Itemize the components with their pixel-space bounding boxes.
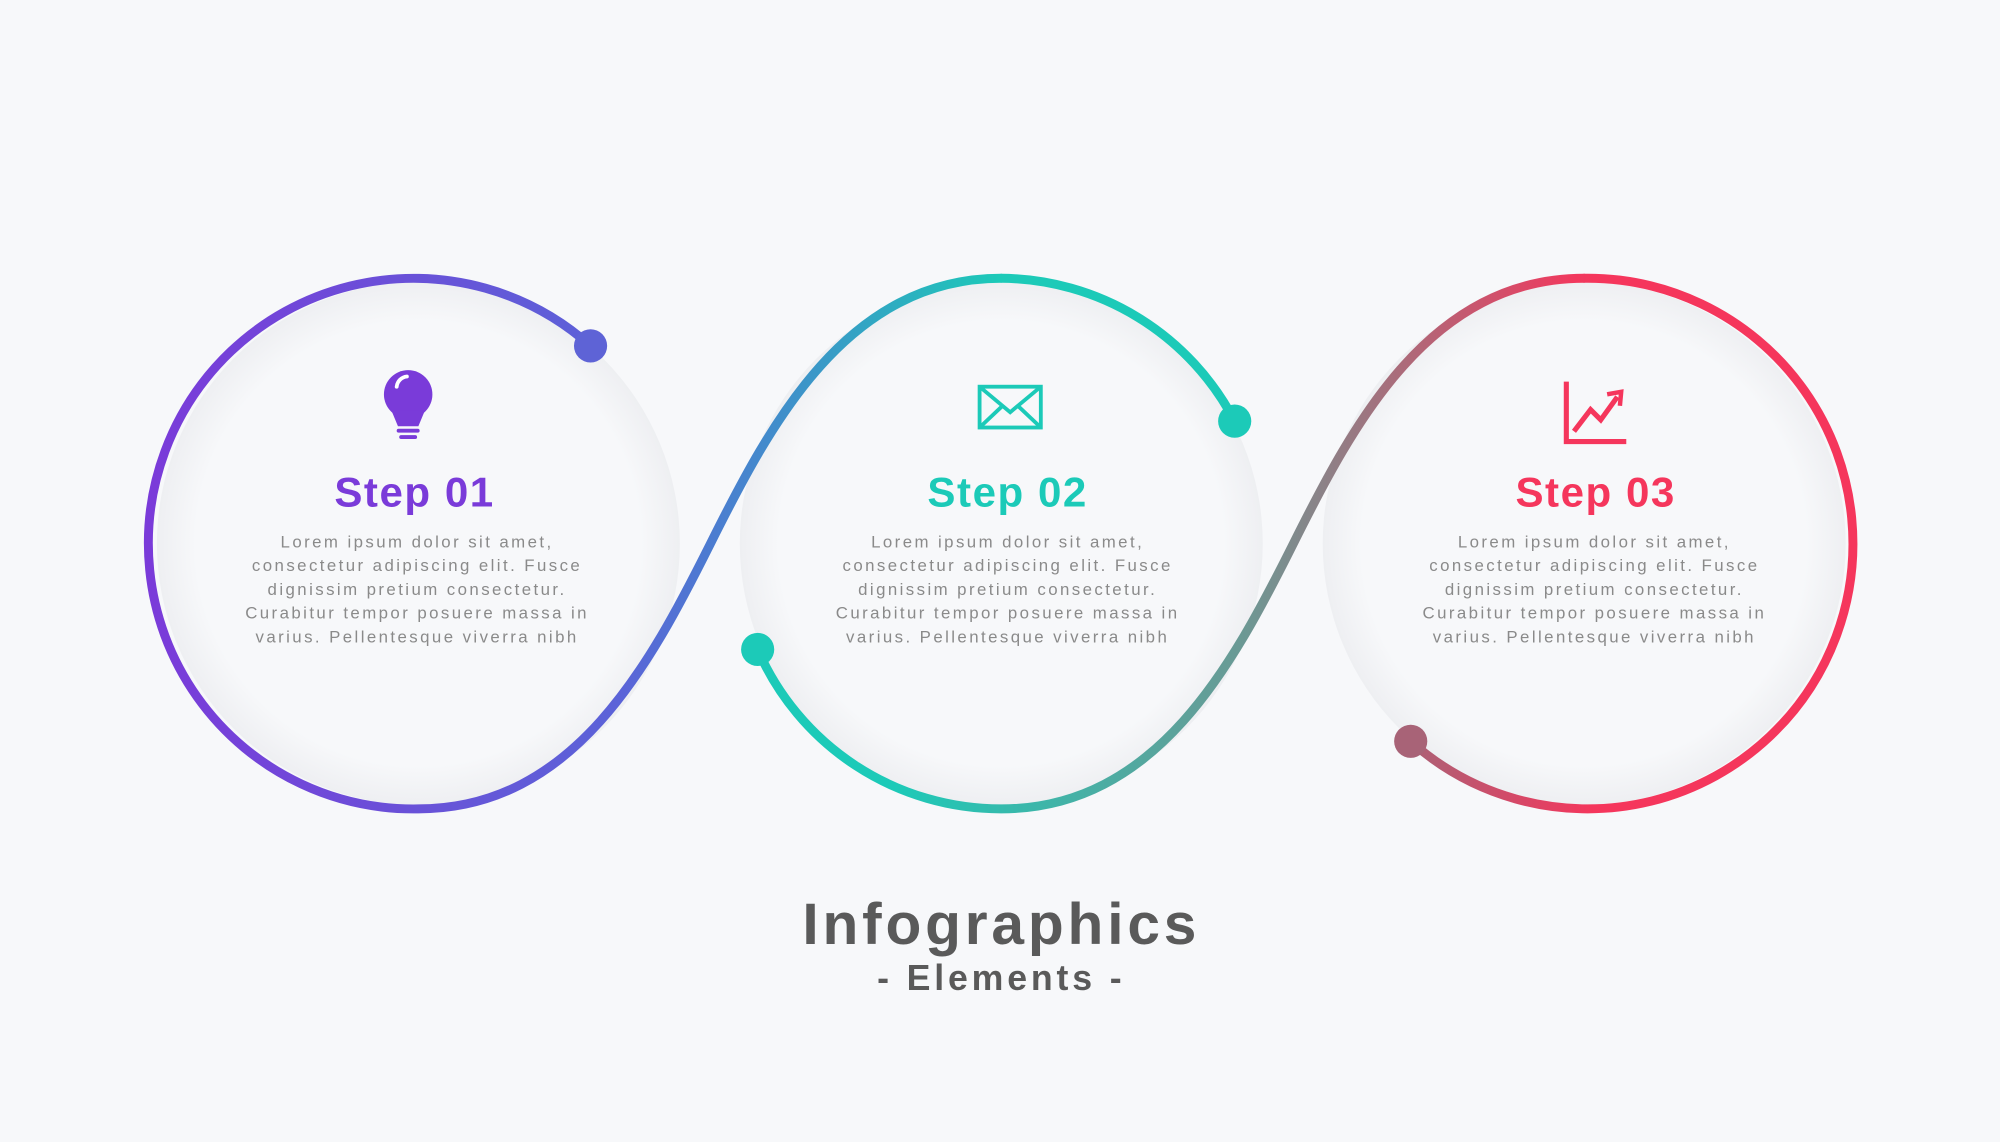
text block: step 02: consectetur adipiscing elit. Fusce	[843, 556, 1173, 575]
title: Infographics	[802, 892, 1200, 957]
heading: Step 02: Step 02	[927, 469, 1088, 516]
text block: step 01: varius. Pellentesque viverra nibh	[255, 627, 579, 646]
icon: growth chart	[1566, 382, 1626, 442]
text block: step 01: Curabitur tempor posuere massa in	[245, 604, 589, 623]
text block: step 03: varius. Pellentesque viverra nibh	[1433, 627, 1756, 646]
dot: circle 2 end	[1218, 405, 1251, 438]
text block: step 02: dignissim pretium consectetur.	[858, 580, 1157, 599]
text block: step 02: Lorem ipsum dolor sit amet,	[871, 532, 1144, 551]
text block: step 02: varius. Pellentesque viverra nibh	[846, 627, 1169, 646]
text block: step 02: Curabitur tempor posuere massa in	[836, 604, 1180, 623]
text block: step 01: dignissim pretium consectetur.	[268, 580, 567, 599]
icon: envelope	[980, 387, 1041, 428]
text block: step 03: Lorem ipsum dolor sit amet,	[1458, 532, 1731, 551]
text block: step 03: Curabitur tempor posuere massa in	[1423, 604, 1766, 623]
text block: step 01: Lorem ipsum dolor sit amet,	[281, 532, 554, 551]
background circle discs	[157, 282, 1846, 805]
path: circle 1 and S-curve to circle 2	[148, 278, 1001, 809]
heading: Step 01: Step 01	[334, 469, 495, 516]
dot: circle 3 end	[1394, 725, 1427, 758]
heading: Step 03: Step 03	[1515, 469, 1676, 516]
dot: circle 1 end	[574, 329, 607, 362]
text block: step 03: consectetur adipiscing elit. Fusce	[1429, 556, 1760, 575]
path: circle 3 arc	[1411, 278, 1853, 809]
dot: circle 2 start	[741, 633, 774, 666]
path: circle 2 upper right arc	[1001, 278, 1235, 421]
text block: step 03: dignissim pretium consectetur.	[1445, 580, 1744, 599]
icon: light bulb	[384, 370, 432, 439]
text block: step 01: consectetur adipiscing elit. Fusce	[252, 556, 582, 575]
subtitle: - Elements -	[877, 958, 1125, 998]
path: circle 2 lower arc and S-curve to circle 3	[758, 278, 1584, 809]
